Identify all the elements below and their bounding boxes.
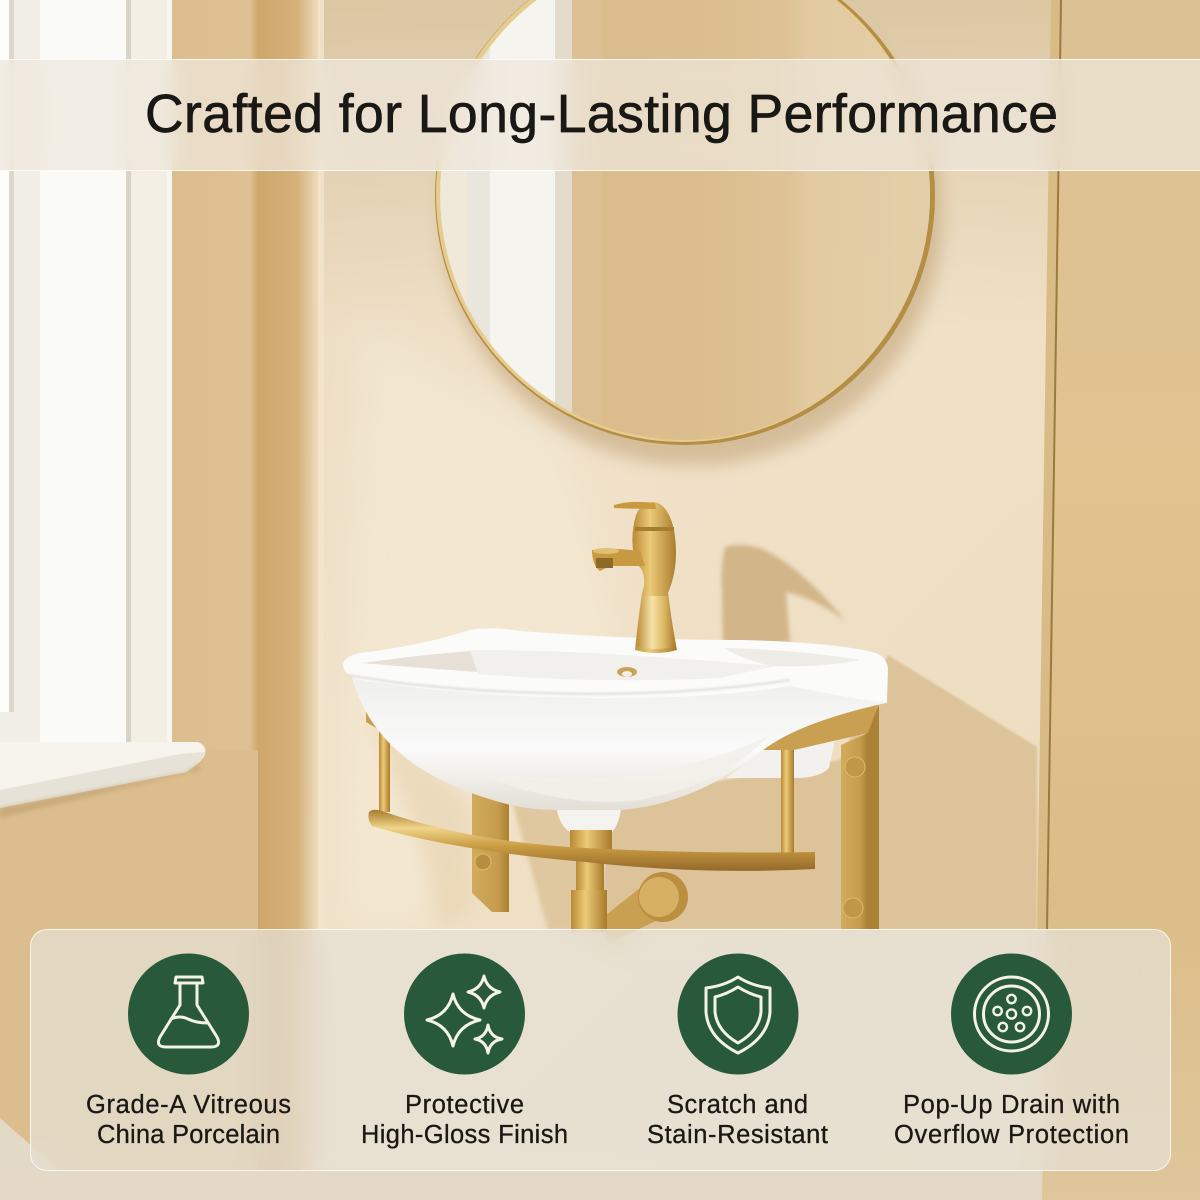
label: gloss: High-Gloss Finish (360, 1120, 568, 1148)
icon: sparkles (426, 976, 502, 1052)
label: porcelain (86, 1090, 290, 1148)
label: scratch resistant (646, 1090, 828, 1148)
label: drain (894, 1090, 1128, 1148)
right support arm (763, 703, 879, 750)
feature: drain (894, 953, 1128, 1148)
feature: gloss (360, 953, 568, 1148)
towel bar (368, 810, 815, 871)
label: scratch resistant: Stain-Resistant (646, 1120, 828, 1148)
light streaks on wall (340, 320, 620, 930)
rear basin (726, 740, 835, 778)
left rear arm (366, 705, 390, 736)
label: scratch resistant: Scratch and (666, 1090, 808, 1118)
collar (570, 830, 612, 854)
wall panel edges (318, 0, 1062, 930)
icon: shield (706, 976, 770, 1052)
floor (0, 1171, 1042, 1200)
label: porcelain: Grade-A Vitreous (86, 1090, 290, 1118)
sink (343, 628, 888, 832)
mirror (430, 0, 950, 450)
label: gloss: Protective (404, 1090, 524, 1118)
feature: scratch resistant (646, 953, 828, 1148)
towel bar supports (379, 720, 794, 854)
pipes and trap (571, 845, 688, 945)
label: drain: Overflow Protection (894, 1120, 1128, 1148)
left wall (165, 0, 320, 1180)
right wall (1042, 0, 1200, 1200)
icon: flask (158, 976, 218, 1046)
panel: features (30, 929, 1171, 1171)
wall brackets (472, 705, 879, 930)
label: drain: Pop-Up Drain with (902, 1090, 1120, 1118)
window (0, 0, 172, 750)
faucet shadow on wall (721, 545, 846, 650)
window sill (0, 742, 205, 818)
title: Crafted for Long-Lasting Performance (145, 85, 1058, 144)
sink shadow on wall (366, 655, 1037, 930)
faucet (592, 502, 677, 653)
mirror shadow (442, 0, 942, 466)
label: gloss (360, 1090, 568, 1148)
feature: porcelain (86, 953, 290, 1148)
icon: drain (974, 976, 1048, 1050)
label: porcelain: China Porcelain (96, 1120, 280, 1148)
title band (0, 59, 1200, 171)
baseboard (0, 1118, 70, 1180)
